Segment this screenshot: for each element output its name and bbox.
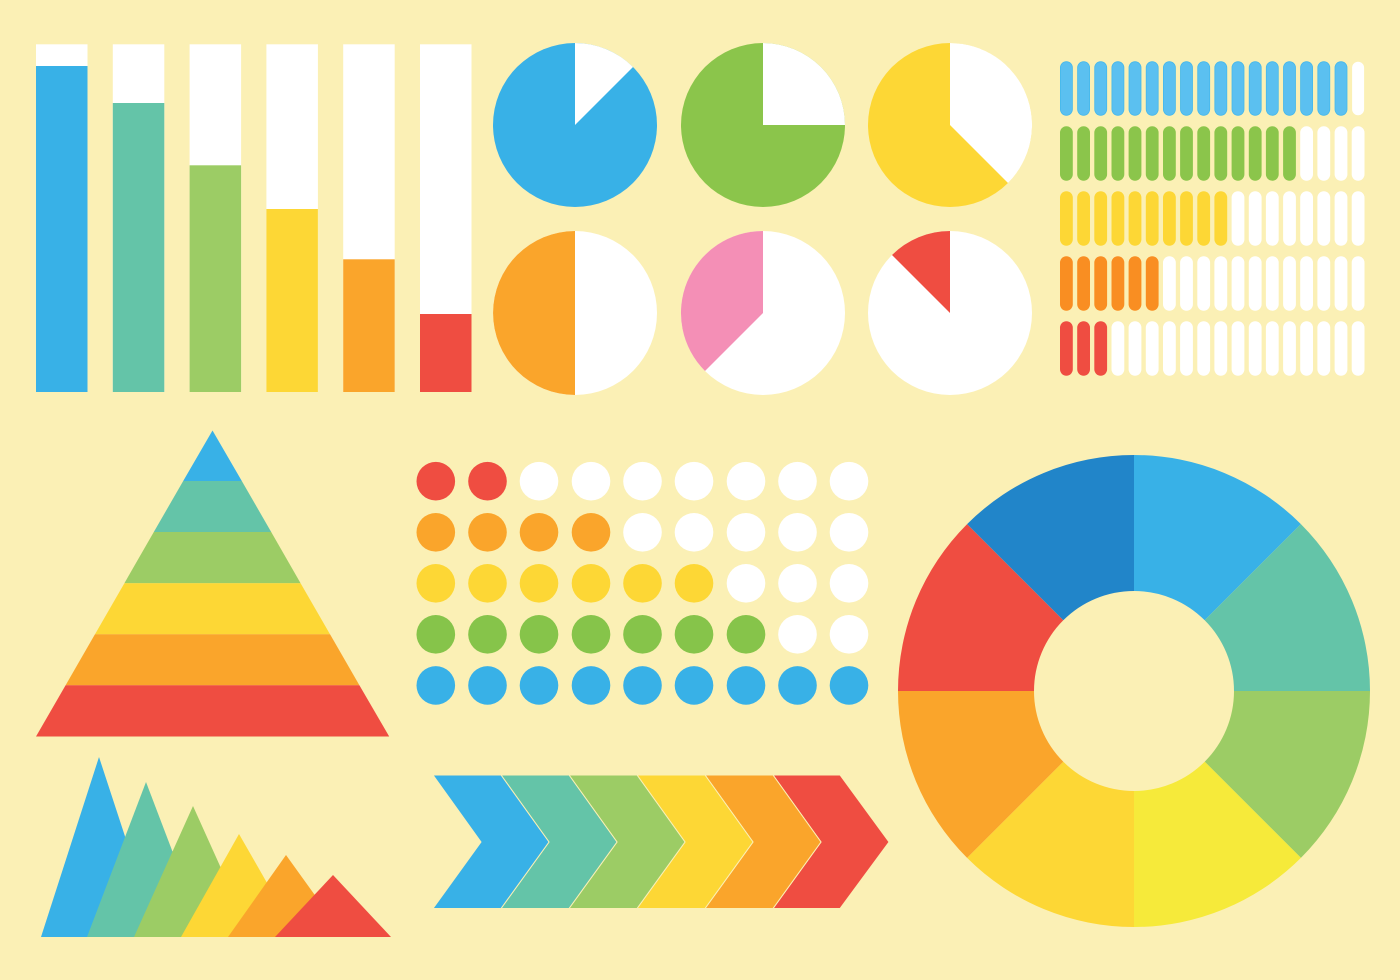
donut segment: green [1205,691,1370,858]
triangle: teal [87,782,205,937]
pyramid tier 2: teal [154,481,271,532]
dot row 3: yellow 6 of 9 [416,564,868,603]
chevron: orange [705,775,821,908]
dot matrix chart [416,462,868,705]
pie: green 3/4 [681,43,845,207]
dot row 4: green 7 of 9 [416,615,868,654]
triangle: blue [41,757,158,937]
pill row 3: yellow 10 of 18 [1060,191,1364,246]
chevron: green [569,775,685,908]
dot row 2: orange 4 of 9 [416,513,868,552]
layered pyramid [36,430,389,736]
pill progress rows [1060,62,1364,376]
bar 3: green [190,44,241,392]
pie: yellow 5/8 [868,43,1032,207]
dot row 5: blue 9 of 9 [416,666,868,705]
donut segment: red [898,524,1063,691]
donut segment: yellow [967,762,1134,927]
triangle: yellow [181,834,298,937]
chevron: blue [433,775,549,908]
bar 4: yellow [266,44,318,392]
pill row 4: orange 6 of 18 [1060,256,1364,311]
triangle: orange [228,855,345,937]
triangle: green [134,806,252,937]
chevron: red arrow [773,775,889,908]
pyramid tier 6: red [36,685,389,736]
pyramid tier 1: blue [183,430,242,481]
bar 6: red [420,44,472,392]
chevron: teal [501,775,617,908]
donut segment: dark blue [967,455,1134,620]
pyramid tier 4: yellow [95,583,330,634]
overlapping triangle chart [41,757,391,937]
pie: red 1/8 [868,231,1032,395]
pie charts grid [493,43,1032,395]
chevron arrow process [433,775,889,908]
triangle: red [275,875,391,937]
donut chart [898,455,1370,927]
pie: pink 3/8 [681,231,845,395]
pie: orange 1/2 [493,231,657,395]
pyramid tier 5: orange [66,634,359,685]
pie: blue 7/8 [493,43,657,207]
pyramid tier 3: green [124,532,301,583]
bar 2: teal [113,44,164,392]
chevron: yellow [637,775,753,908]
bar chart: vertical progress bars [36,44,472,392]
bar 1: blue [36,44,88,392]
pill row 5: red 3 of 18 [1060,321,1364,376]
bar 5: orange [343,44,395,392]
pill row 1: blue 17 of 18 [1060,62,1364,115]
donut segment: sky blue [1134,455,1301,620]
pill row 2: green 14 of 18 [1060,126,1364,181]
donut segment: teal [1205,524,1370,691]
dot row 1: red 2 of 9 [416,462,868,501]
donut segment: orange [898,691,1063,858]
donut segment: lemon [1134,762,1301,927]
